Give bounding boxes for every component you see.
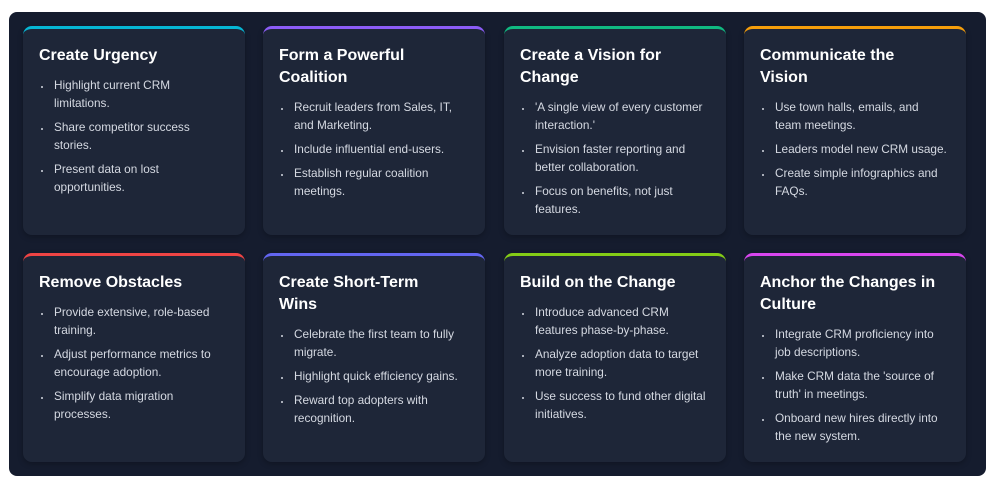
card: Create a Vision for Change: Create a Vision for Change [520, 47, 661, 86]
card: Create Short-Term Wins: Reward top adopters with recognition. [294, 393, 428, 425]
card: Form a Powerful Coalition: Form a Powerful Coalition [279, 47, 404, 86]
card: Anchor the Changes in Culture: Onboard new hires directly into the new system. [775, 411, 938, 443]
card: Create Urgency: Highlight current CRM limitations. [54, 78, 170, 110]
card: Create Short-Term Wins [263, 253, 485, 462]
card: Anchor the Changes in Culture [744, 253, 966, 462]
card: Communicate the Vision: Create simple infographics and FAQs. [775, 166, 938, 198]
card: Create Urgency [23, 26, 245, 235]
card: Form a Powerful Coalition [263, 26, 485, 235]
card: Build on the Change: Build on the Change [520, 274, 676, 291]
card: Build on the Change: Use success to fund other digital initiatives. [535, 389, 706, 421]
card: Create Short-Term Wins: Celebrate the first team to fully migrate. [294, 327, 454, 359]
card: Communicate the Vision [744, 26, 966, 235]
card: Create Urgency: Create Urgency [39, 47, 157, 64]
card: Remove Obstacles: Simplify data migration processes. [54, 389, 173, 421]
card: Form a Powerful Coalition: Establish regular coalition meetings. [294, 166, 428, 198]
card: Remove Obstacles: Remove Obstacles [39, 274, 182, 291]
card: Build on the Change [504, 253, 726, 462]
card: Create Urgency: Share competitor success stories. [54, 120, 190, 152]
card: Create a Vision for Change: Envision faster reporting and better collaboration. [535, 142, 685, 174]
card: Create Urgency: Present data on lost opportunities. [54, 162, 159, 194]
card: Form a Powerful Coalition: Include influential end-users. [294, 142, 444, 156]
card: Remove Obstacles [23, 253, 245, 462]
card: Create a Vision for Change: 'A single view of every customer interaction.' [535, 100, 702, 132]
card: Form a Powerful Coalition: Recruit leaders from Sales, IT, and Marketing. [294, 100, 452, 132]
card: Anchor the Changes in Culture: Integrate CRM proficiency into job descriptions. [775, 327, 934, 359]
card: Communicate the Vision: Use town halls, emails, and team meetings. [775, 100, 919, 132]
card: Remove Obstacles: Adjust performance metrics to encourage adoption. [54, 347, 211, 379]
card: Create Short-Term Wins: Highlight quick efficiency gains. [294, 369, 458, 383]
card: Create a Vision for Change [504, 26, 726, 235]
card: Build on the Change: Analyze adoption data to target more training. [535, 347, 698, 379]
card: Create a Vision for Change: Focus on benefits, not just features. [535, 184, 673, 216]
card: Remove Obstacles: Provide extensive, role-based training. [54, 305, 209, 337]
card: Anchor the Changes in Culture: Anchor the Changes in Culture [760, 274, 935, 313]
card: Anchor the Changes in Culture: Make CRM data the 'source of truth' in meetings. [775, 369, 934, 401]
card: Create Short-Term Wins: Create Short-Term Wins [279, 274, 418, 313]
card: Communicate the Vision: Communicate the Vision [760, 47, 894, 86]
card: Communicate the Vision: Leaders model new CRM usage. [775, 142, 947, 156]
card: Build on the Change: Introduce advanced CRM features phase-by-phase. [535, 305, 669, 337]
